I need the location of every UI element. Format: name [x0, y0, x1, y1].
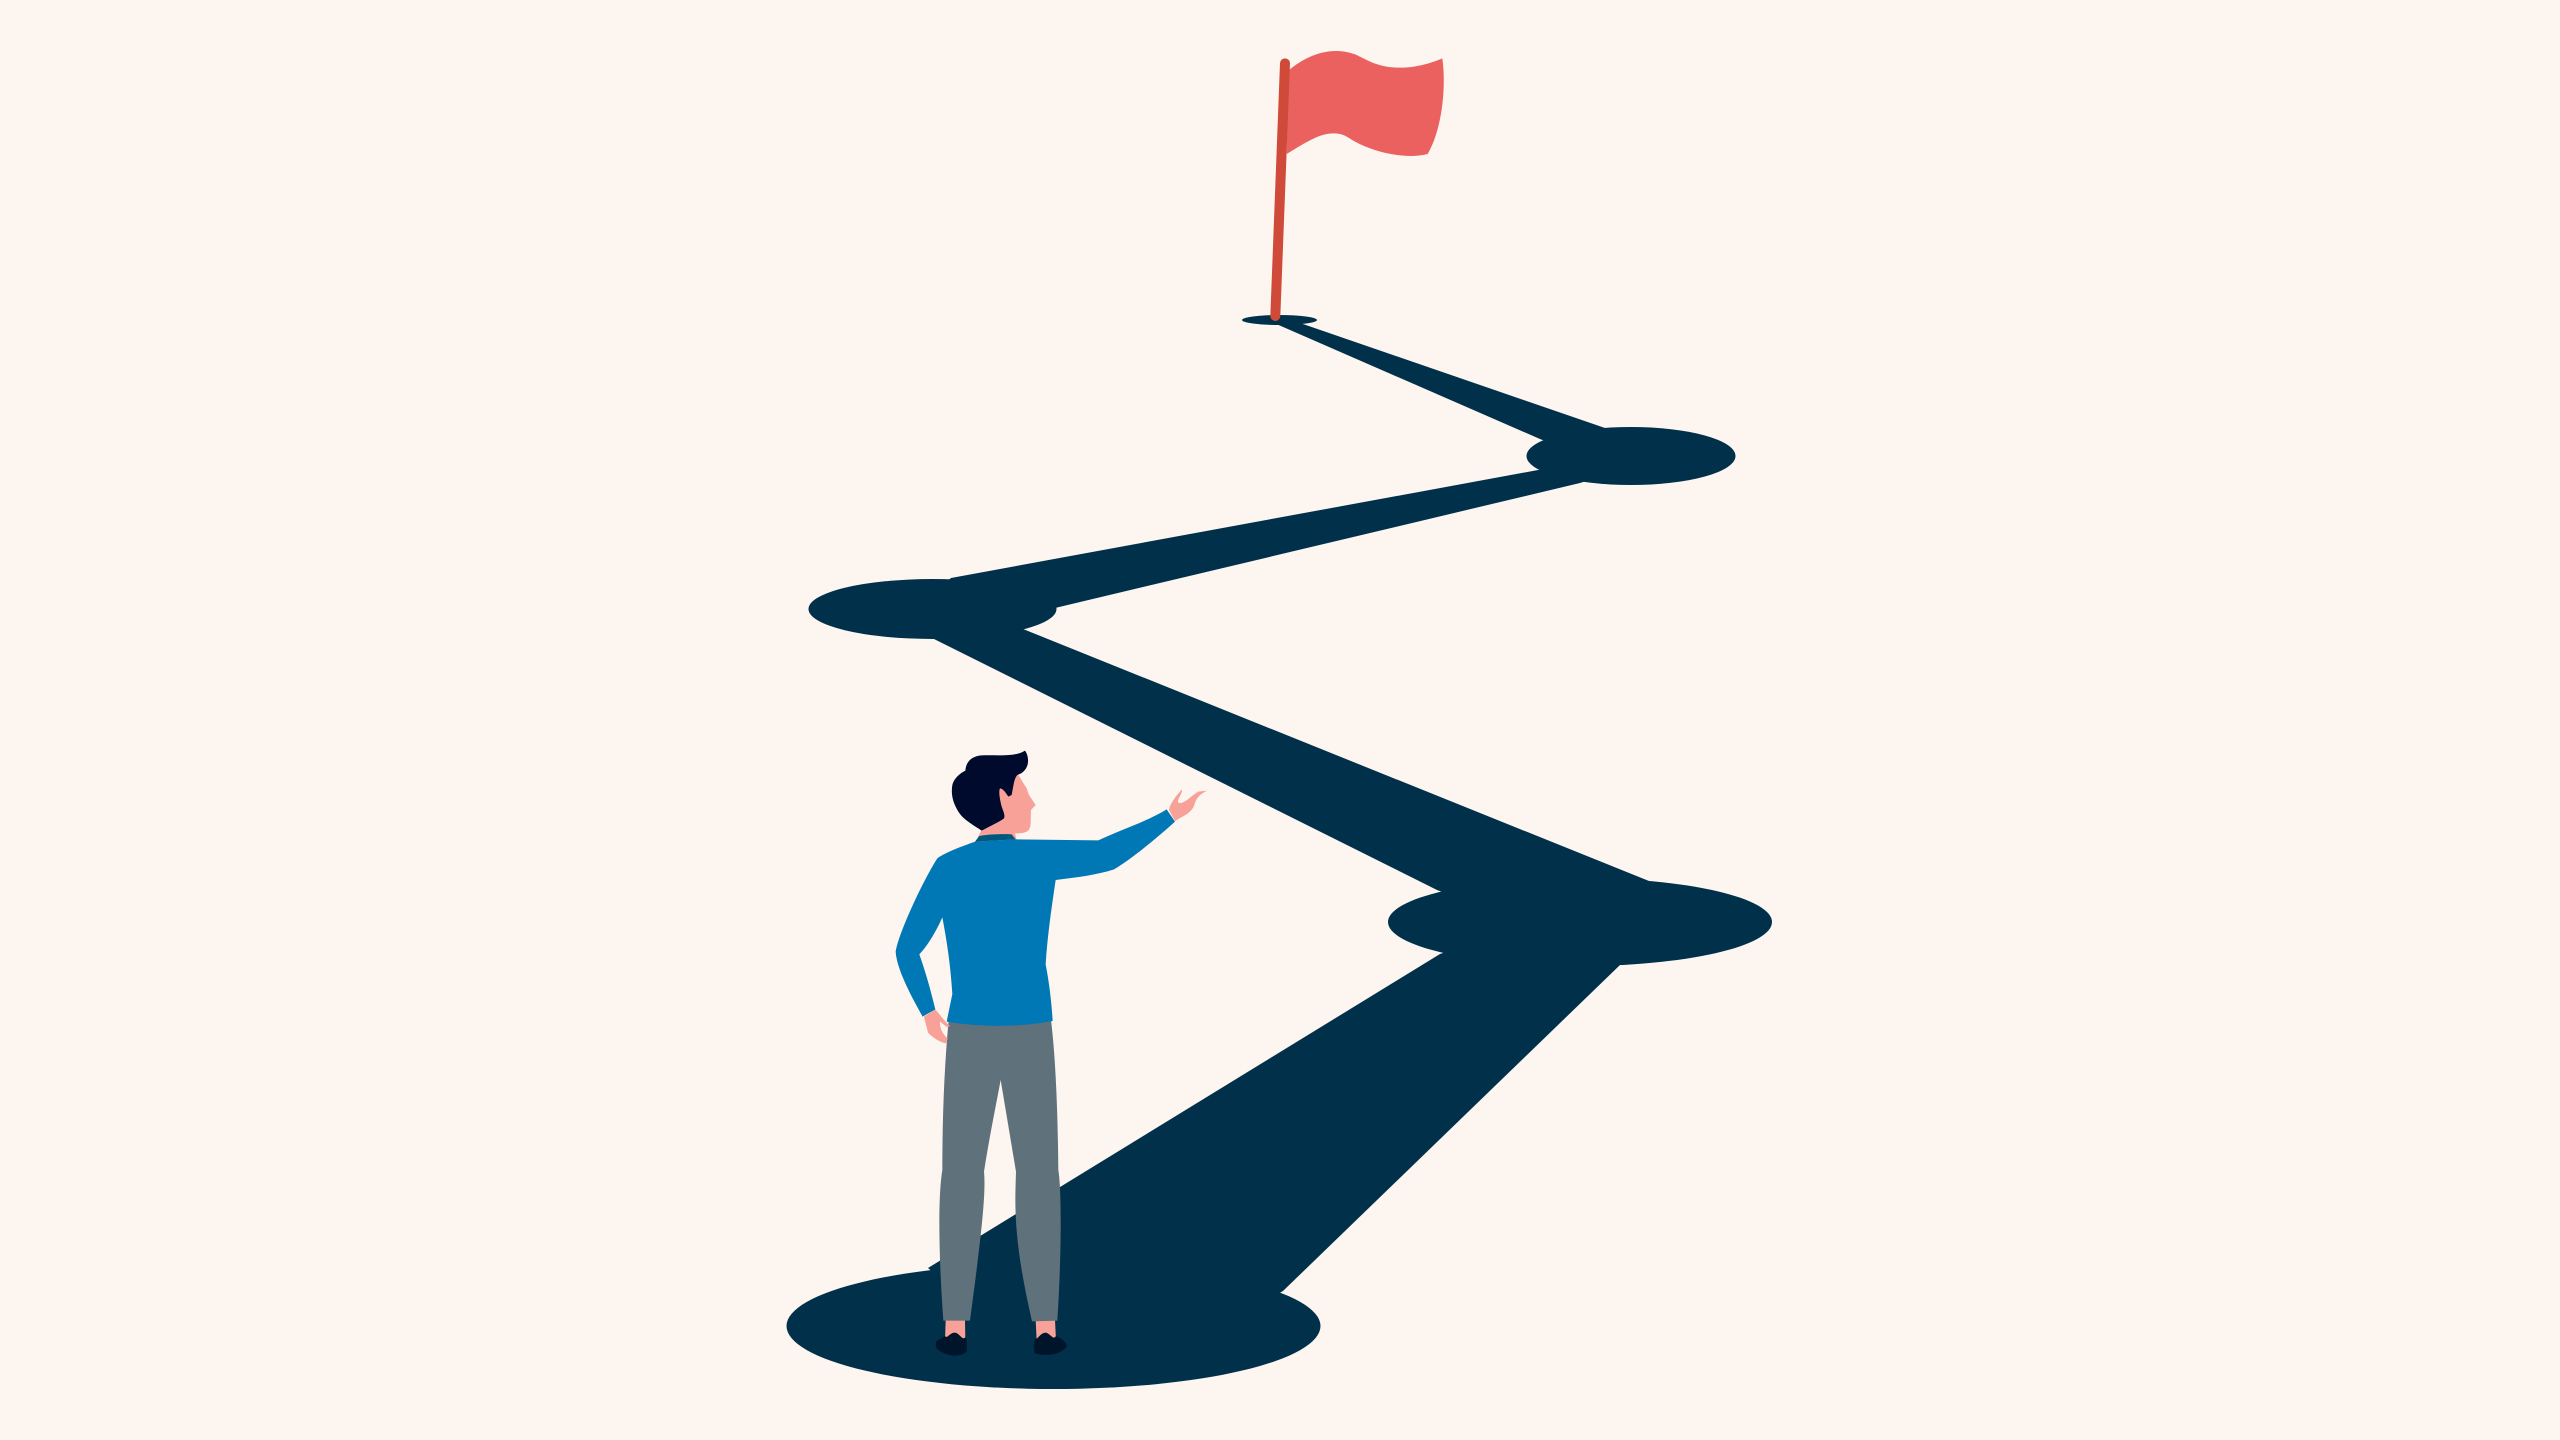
path stop: upper right ellipse [1526, 427, 1736, 485]
shoes [936, 1333, 1067, 1356]
path segment: right to bottom [928, 900, 1620, 1340]
raised hand [1169, 789, 1207, 821]
trousers [939, 1020, 1061, 1321]
man upper body [896, 751, 1207, 1043]
collar [975, 834, 1016, 842]
path segment: middle left to right [934, 610, 1649, 950]
path segment: upper right to middle left [900, 470, 1620, 630]
face and neck [975, 773, 1036, 843]
path stop: right ellipse [1388, 878, 1772, 966]
flag pole [1275, 63, 1285, 316]
man [896, 751, 1207, 1356]
flag cloth [1287, 51, 1444, 156]
lowered hand [924, 1009, 950, 1043]
path segment: flag to upper right [1274, 323, 1620, 470]
blue sweater [896, 809, 1175, 1026]
path stop: middle left ellipse [808, 579, 1056, 639]
man legs and feet [936, 1020, 1067, 1356]
winding shadow path [786, 315, 1772, 1389]
socks and ankles [945, 1320, 1056, 1341]
path stop: flag base ellipse [1242, 315, 1317, 325]
path stop: bottom ellipse [786, 1263, 1320, 1389]
hair [952, 751, 1028, 831]
flag [1275, 51, 1444, 316]
